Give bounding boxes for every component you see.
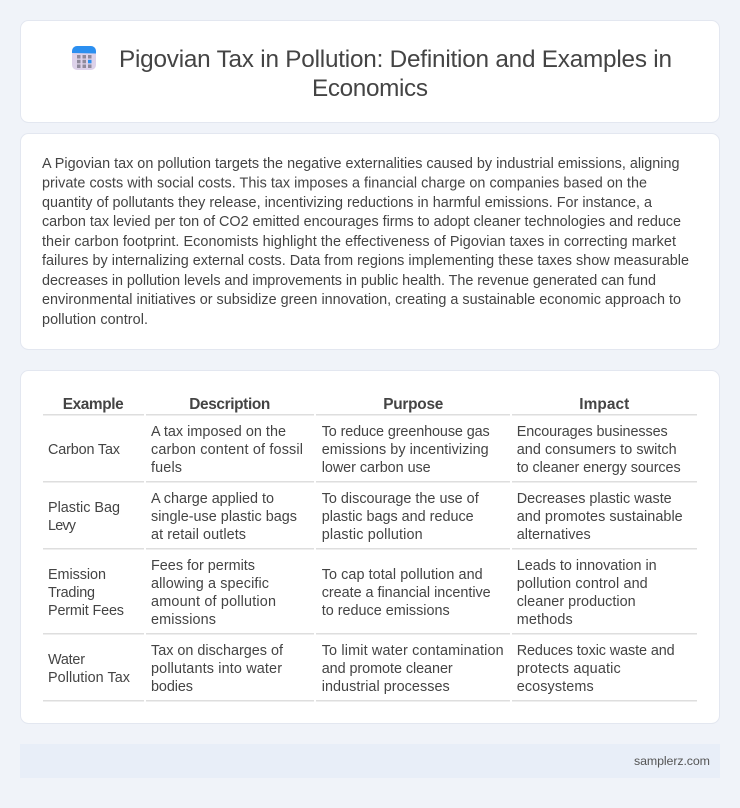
table row: plastic bag levy: alternatives [517, 527, 591, 543]
table row: emission trading permit fees: allowing a specific [151, 576, 269, 592]
table header row [63, 396, 629, 413]
table row: emission trading permit fees: to reduce emissions [322, 603, 450, 619]
table row: water pollution tax: To limit water contamination [322, 643, 504, 659]
table row: emission trading permit fees: methods [517, 612, 573, 628]
table row: carbon tax: emissions by incentivizing [322, 442, 489, 458]
table row: carbon tax [48, 424, 681, 476]
table row: carbon tax: to cleaner energy sources [517, 460, 681, 476]
table row: plastic bag levy: at retail outlets [151, 527, 246, 543]
table row: emission trading permit fees: create a financial incentive [322, 585, 491, 601]
title: Economics [312, 75, 428, 102]
table row: emission trading permit fees: Permit Fees [48, 603, 124, 619]
table row: emission trading permit fees: pollution control and [517, 576, 648, 592]
table row: emission trading permit fees: amount of pollution [151, 594, 276, 610]
panel: examples table [20, 370, 720, 724]
table row: plastic bag levy: single-use plastic bags [151, 509, 297, 525]
text block: intro: their carbon footprint. Economists highlight the effectiveness of Pigovian taxes in correcting market [42, 234, 676, 250]
text block: intro: private costs with social costs. This tax imposes a financial charge on companies based on the [42, 176, 647, 192]
text block: intro: quantity of pollutants they release, incentivizing reductions in harmful emissions. For instance, a [42, 195, 652, 211]
table row: water pollution tax: pollutants into water [151, 661, 282, 677]
icon: calendar [72, 46, 96, 70]
footer [20, 744, 720, 778]
table row: water pollution tax: bodies [151, 679, 193, 695]
text block: intro: decreases in pollution levels and improvements in public health. The revenue generated can fund [42, 273, 656, 289]
text block: intro: carbon tax levied per ton of CO2 emitted encourages firms to adopt cleaner technologies and reduce [42, 214, 681, 230]
title [119, 46, 672, 102]
table row: emission trading permit fees: Emission [48, 567, 106, 583]
table row: plastic bag levy: plastic bags and reduce [322, 509, 474, 525]
table row: carbon tax: To reduce greenhouse gas [322, 424, 490, 440]
table row: plastic bag levy [48, 491, 683, 543]
text block: intro: environmental initiatives or subsidize green innovation, creating a sustainable economic approach to [42, 292, 681, 308]
title: Pigovian Tax in Pollution: Definition and Examples in [119, 46, 672, 73]
text block: intro [42, 156, 689, 328]
table row: water pollution tax: Reduces toxic waste and [517, 643, 675, 659]
panel: header [20, 20, 720, 122]
table row: emission trading permit fees: Fees for permits [151, 558, 255, 574]
table row: water pollution tax: ecosystems [517, 679, 594, 695]
table header row: Impact [579, 396, 629, 413]
text block: intro: failures by internalizing external costs. Data from regions implementing these taxes show measurable [42, 253, 689, 269]
table row: plastic bag levy: To discourage the use of [322, 491, 480, 507]
table row: carbon tax: Carbon Tax [48, 442, 121, 458]
table row: emission trading permit fees: cleaner production [517, 594, 636, 610]
table row: water pollution tax: protects aquatic [517, 661, 621, 677]
table row: water pollution tax [48, 643, 675, 695]
table row: water pollution tax: Pollution Tax [48, 670, 131, 686]
table row: emission trading permit fees [48, 558, 657, 628]
table header row: Description [189, 396, 270, 413]
text block: intro: A Pigovian tax on pollution targets the negative externalities caused by industrial emissions, aligning [42, 156, 680, 172]
text block: intro: pollution control. [42, 312, 148, 328]
table row: emission trading permit fees: Trading [48, 585, 95, 601]
table row: carbon tax: fuels [151, 460, 182, 476]
table row: plastic bag levy: Levy [48, 518, 77, 534]
table row: plastic bag levy: plastic pollution [322, 527, 423, 543]
table row: carbon tax: lower carbon use [322, 460, 431, 476]
table header row: Purpose [383, 396, 444, 413]
table row: plastic bag levy: A charge applied to [151, 491, 274, 507]
table row: carbon tax: carbon content of fossil [151, 442, 303, 458]
table row: carbon tax: and consumers to switch [517, 442, 677, 458]
table row: plastic bag levy: Plastic Bag [48, 500, 120, 516]
table row: plastic bag levy: and promotes sustainable [517, 509, 683, 525]
table row: emission trading permit fees: emissions [151, 612, 216, 628]
table row: carbon tax: A tax imposed on the [151, 424, 286, 440]
table row: carbon tax: Encourages businesses [517, 424, 668, 440]
table row: plastic bag levy: Decreases plastic waste [517, 491, 672, 507]
footer: samplerz.com [634, 754, 710, 768]
table row: emission trading permit fees: To cap total pollution and [322, 567, 483, 583]
table row: emission trading permit fees: Leads to innovation in [517, 558, 657, 574]
table row: water pollution tax: industrial processes [322, 679, 450, 695]
table row: water pollution tax: Water [48, 652, 85, 668]
table row: water pollution tax: Tax on discharges of [151, 643, 284, 659]
table header row: Example [63, 396, 124, 413]
table row: water pollution tax: and promote cleaner [322, 661, 453, 677]
panel: intro paragraph [20, 134, 720, 350]
